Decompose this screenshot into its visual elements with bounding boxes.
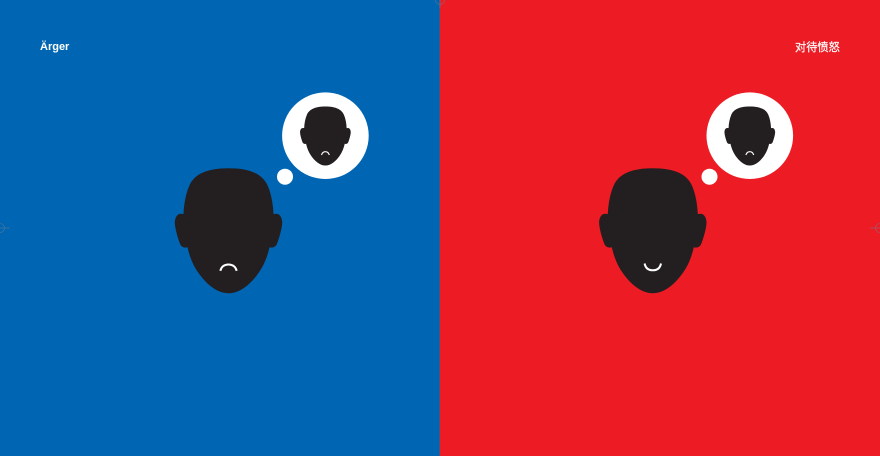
thought bubble: blue panel — [282, 92, 369, 179]
figure: blue panel large head with frown — [175, 168, 282, 293]
heading: Ärger: Ärger — [40, 40, 70, 53]
panel: blue background — [0, 0, 440, 456]
thought bubble dot: blue panel — [277, 169, 293, 185]
panel: red background — [440, 0, 880, 456]
figure: red panel large head with smile — [599, 168, 707, 293]
heading: 对待愤怒: 对待愤怒 — [795, 40, 840, 54]
thought bubble dot: red panel — [702, 169, 718, 185]
thought bubble: red panel — [706, 92, 793, 179]
